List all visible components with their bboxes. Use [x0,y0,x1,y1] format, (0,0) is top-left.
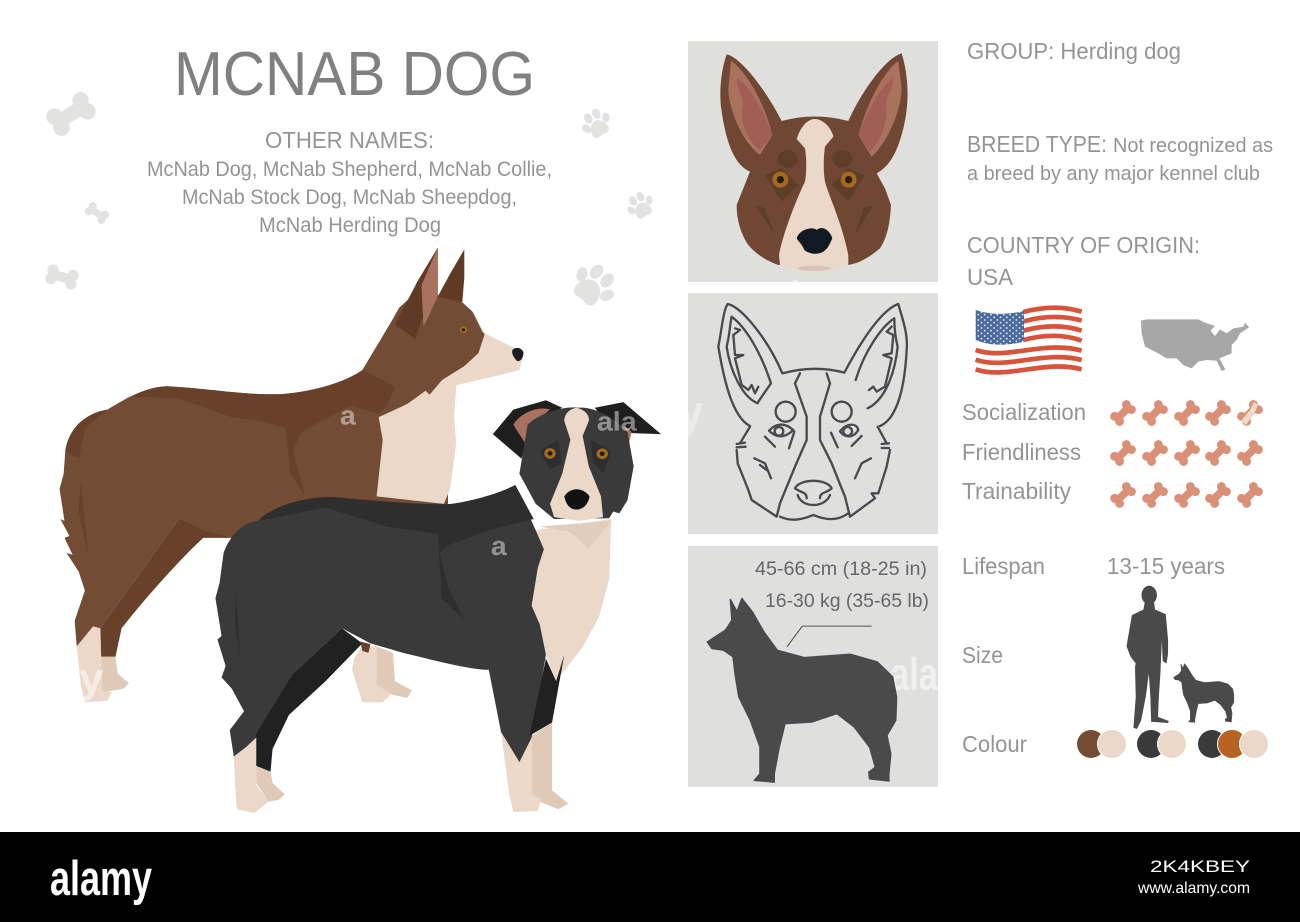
text: breed type [967,131,1273,185]
text: lifespan: Lifespan [962,553,1045,579]
illustration: black dog [215,400,661,813]
rating: trainability [962,478,1265,510]
panel: size silhouette: 45-66 cm (18-25 in) [755,558,927,580]
text: lifespan: 13-15 years [1107,553,1225,579]
illustration: black dog: a [491,531,507,561]
rating: friendliness: Friendliness [962,439,1081,465]
text: country of origin: COUNTRY OF ORIGIN: [967,232,1200,258]
illustration: brown dog [60,248,523,702]
rating: socialization [962,398,1265,428]
text block: other names: McNab Stock Dog, McNab Sheepdog, [182,186,517,209]
panel: dog head line art [678,293,938,534]
text: breed type: a breed by any major kennel club [967,163,1260,185]
chart: human and dog size comparison [1127,586,1234,729]
panel: dog head colour: a [790,274,801,294]
colour swatches [1077,730,1268,758]
text: breed type: Not recognized as [1113,135,1273,157]
rating: trainability: Trainability [962,478,1071,504]
panel: dog head colour [688,41,938,294]
text: group: GROUP: Herding dog [967,38,1181,64]
panel: size silhouette: ala [890,648,938,700]
panel: dog head line art: y [678,386,704,438]
text: breed type: BREED TYPE: [967,131,1107,157]
rating: friendliness [962,438,1265,468]
footer bar: 2K4KBEY [1150,857,1250,876]
text: lifespan [962,553,1225,579]
panel: size silhouette: 16-30 kg (35-65 lb) [765,590,929,612]
rating: socialization: Socialization [962,399,1086,425]
icon: US flag [976,308,1082,372]
decorative bones and paws [43,89,660,316]
text block: other names: McNab Dog, McNab Shepherd, McNab Collie, [147,158,552,181]
text: colour: Colour [962,731,1027,757]
illustration: black dog: ala [597,406,637,436]
text: size: Size [962,642,1003,668]
text block: other names: OTHER NAMES: [265,127,434,153]
title: MCNAB DOG [174,40,535,109]
illustration: brown dog: y [79,656,104,702]
text block: other names [147,127,552,237]
text block: other names: McNab Herding Dog [259,214,441,237]
footer bar: alamy [50,852,152,906]
footer bar: www.alamy.com [1137,880,1250,897]
text: country of origin [967,232,1200,290]
icon: USA map [1141,319,1249,371]
footer bar [0,832,1300,922]
panel: size silhouette [688,546,938,787]
text: country of origin: USA [967,264,1014,290]
illustration: brown dog: a [340,401,356,430]
